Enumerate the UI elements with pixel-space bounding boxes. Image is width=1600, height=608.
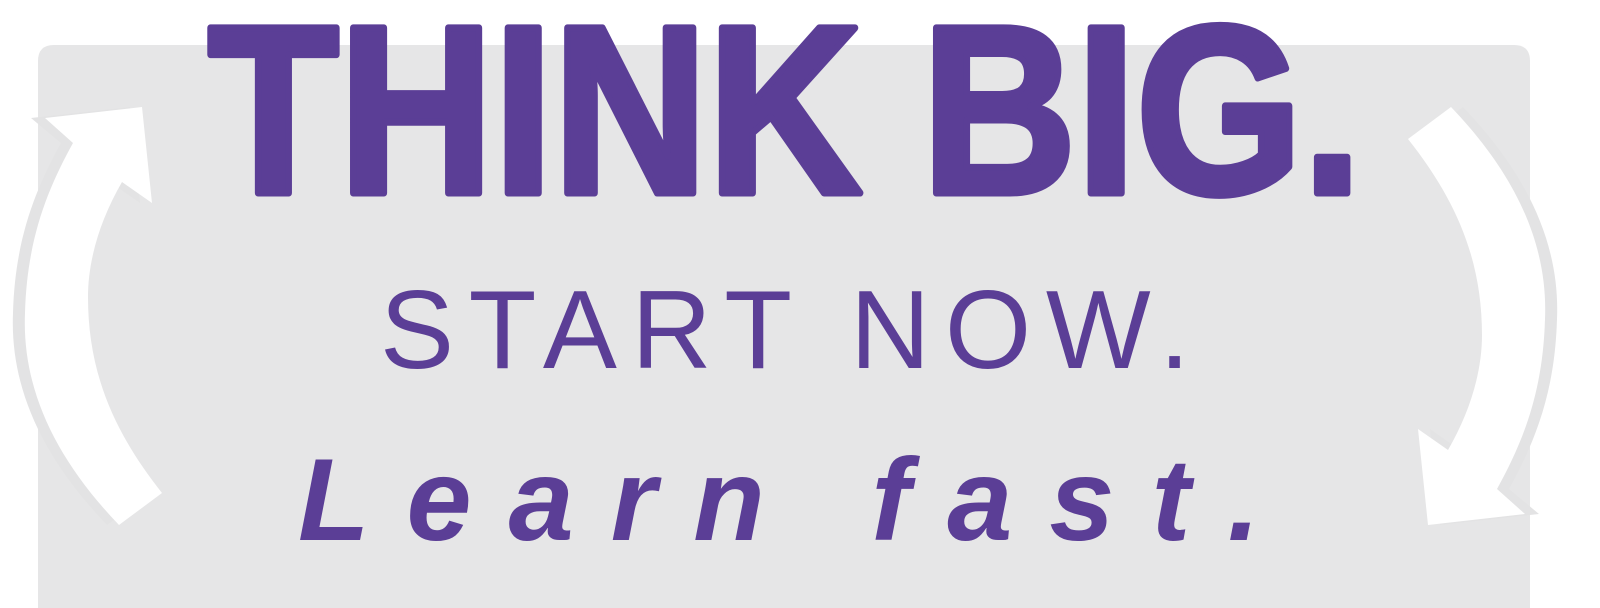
- subtitle: START NOW.: START NOW.: [380, 268, 1190, 392]
- icon: right arrow: [1408, 107, 1557, 525]
- tagline: Learn fast.: Learn fast.: [298, 434, 1260, 565]
- icon: left arrow: [13, 107, 162, 525]
